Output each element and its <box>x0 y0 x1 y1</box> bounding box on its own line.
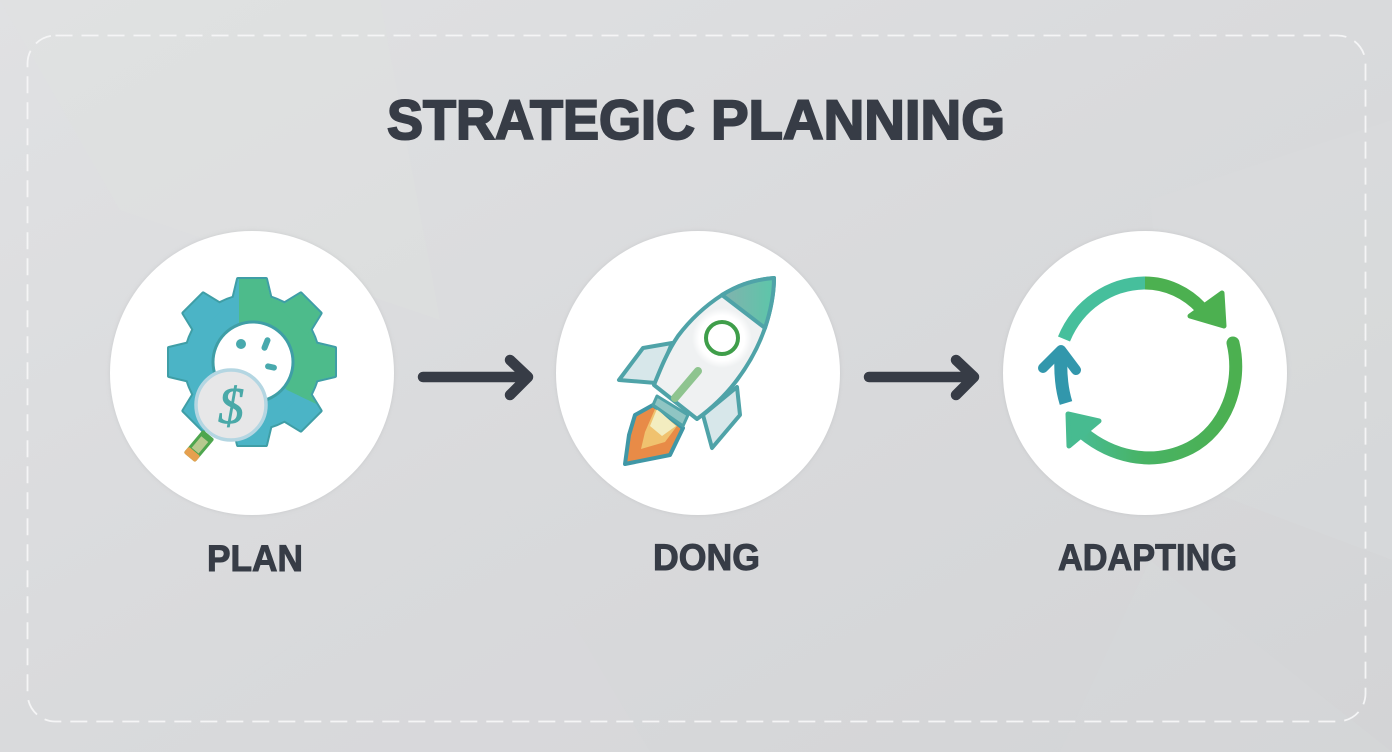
step 3: adapting <box>1003 231 1287 578</box>
window <box>706 322 738 354</box>
nozzle <box>653 396 688 426</box>
stick <box>675 371 698 398</box>
left fin <box>619 343 672 383</box>
nose <box>722 278 774 328</box>
icon: cycle arrows <box>1043 283 1236 458</box>
title: STRATEGIC <box>387 88 695 151</box>
arc bottom <box>1083 343 1236 458</box>
circle: doing <box>556 231 840 515</box>
flame <box>625 405 683 464</box>
arrow left <box>1061 356 1066 403</box>
step 2: doing <box>556 231 840 578</box>
title: PLANNING <box>711 88 1005 151</box>
label: doing: DONG <box>653 537 760 578</box>
circle: adapting <box>1003 231 1287 515</box>
step 1: plan <box>110 231 394 579</box>
arc top <box>1064 283 1146 339</box>
icon: gear with dollar magnifier: $ <box>218 378 244 435</box>
label: adapting: ADAPTING <box>1058 537 1237 578</box>
icon: gear with dollar magnifier <box>169 279 335 462</box>
icon: rocket <box>619 278 774 464</box>
arrow: doing to adapting <box>869 360 974 395</box>
label: plan: PLAN <box>207 538 303 579</box>
arrow: plan to doing <box>423 360 528 395</box>
circle: plan <box>110 231 394 515</box>
body <box>654 278 774 419</box>
title <box>387 88 1005 151</box>
right fin <box>703 387 740 448</box>
